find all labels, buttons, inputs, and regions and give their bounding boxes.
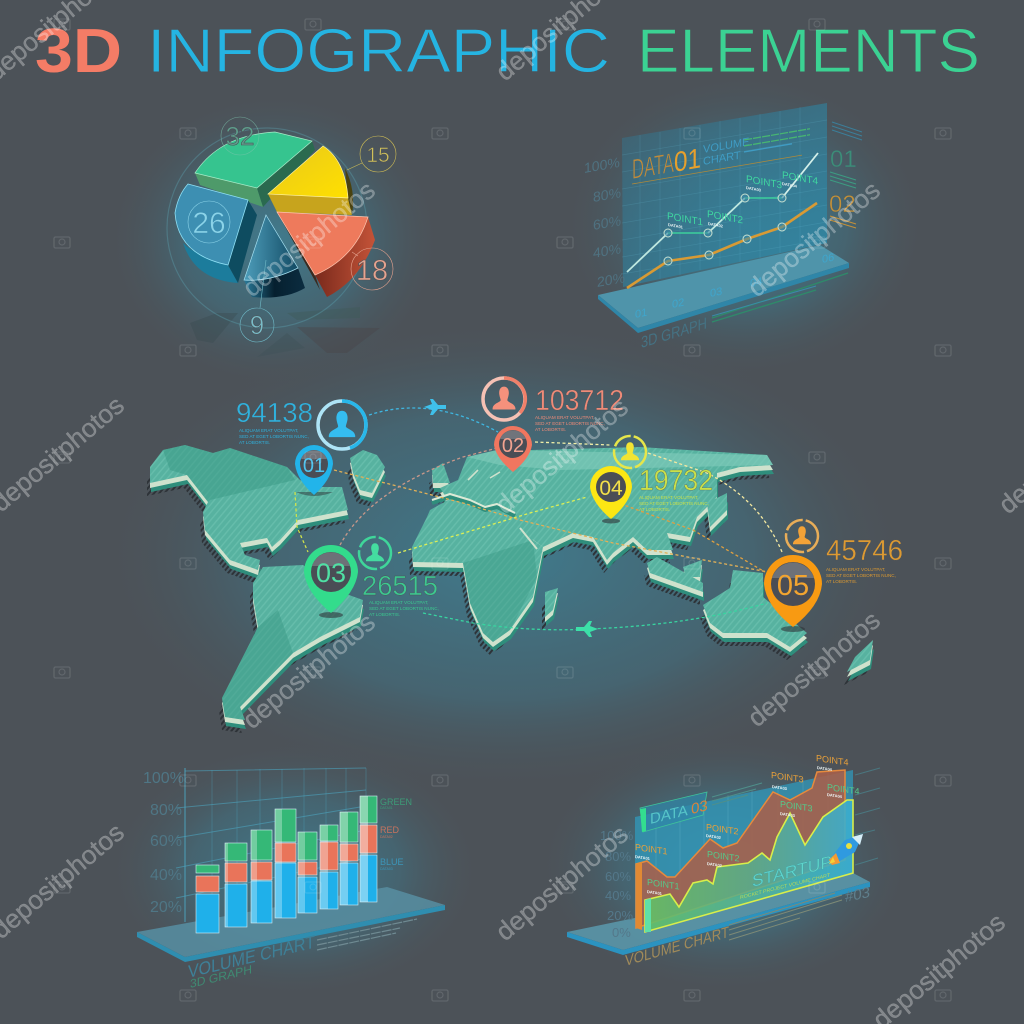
value block 19732: AT LOBORTIS. [639,507,670,512]
graph point labels: POINT4 [782,170,819,188]
graph axis labels: 60% [593,212,621,233]
area point labels: DATA02 [706,833,722,840]
graph point labels: DATA02 [708,221,724,229]
graph point labels [667,170,819,230]
value block 19732: 19732 [639,465,713,497]
green area left edge [645,898,651,932]
area point labels: POINT4 [816,753,848,768]
bar legend: DATA01 [380,806,393,810]
bar legend [380,797,412,871]
area y labels: 40% [605,888,631,903]
orange area left edge [636,862,642,930]
pie floor shadows [190,307,380,357]
pie value labels [188,117,396,342]
value block 45746 [826,535,903,584]
area back panel [635,770,853,928]
area point labels: POINT1 [647,877,679,892]
slice: green 32 [195,132,315,207]
graph point labels: POINT1 [667,211,704,229]
area point labels: DATA01 [635,854,651,861]
value block 103712 [535,385,624,432]
graph point labels: POINT2 [707,209,744,227]
value block 94138: SED AT EGET LOBORTIS NUNC, [239,434,309,439]
pie orbit ring [167,128,367,328]
graph back panel [622,103,827,287]
area caption: VOLUME CHART [625,924,729,970]
area point labels: DATA02 [707,861,723,868]
area grid [656,772,828,925]
title: INFOGRAPHIC [147,17,610,86]
data badge [640,783,762,832]
area y labels: 60% [605,869,631,884]
slice: yellow 15 [268,146,353,215]
value block 94138: ALIQUAM ERAT VOLUTPAT, [239,428,298,433]
value block 45746: ALIQUAM ERAT VOLUTPAT, [826,567,885,572]
bar chart y labels: 60% [150,833,182,850]
orange area series [636,770,845,928]
bar 1 [196,865,219,933]
bar chart grid [176,768,366,922]
icon: plane left [424,399,446,415]
value block 26515 [362,570,439,617]
glow halos [95,70,930,1000]
stock watermark text: depositphotos [490,392,634,520]
map continents [150,445,873,720]
title [35,17,980,86]
graph heading: DATA [632,146,674,185]
area point labels: POINT2 [706,822,738,837]
map facet shading [163,445,773,720]
bar 6 [320,825,338,909]
pin 02: 02 [502,435,524,457]
panel: 3D line graph: 06 [822,252,834,266]
graph heading: 01 [674,141,701,178]
area point labels: DATA04 [817,765,833,772]
value block 19732: SED AT EGET LOBORTIS NUNC, [639,501,709,506]
map flight routes [295,408,782,630]
pin 04: 04 [599,477,623,500]
bar 5 [298,832,317,913]
value block 26515: 26515 [362,570,438,601]
bar chart y labels: 100% [143,770,184,787]
graph point labels: DATA04 [782,181,798,189]
area point labels: POINT2 [707,849,739,864]
map extruded sides [151,454,874,729]
pin 02 [494,426,532,472]
area point labels: POINT4 [827,782,859,797]
graph side legend: 01 [830,146,857,173]
bar legend: RED [380,825,400,835]
pin 04 [590,466,632,524]
value block 94138: 94138 [236,397,313,428]
area y labels: 100% [600,828,634,843]
slice: blue 26 [175,184,257,283]
graph side legend: 02 [829,191,856,218]
startup label: ROCKET PROJECT VOLUME CHART [740,873,830,901]
panel: 3D pie chart [167,117,396,357]
person badge 01 [318,401,366,449]
area point labels: DATA03 [780,811,796,818]
graph point labels: DATA01 [668,222,684,230]
graph heading: VOLUME [703,136,749,156]
bar chart y labels: 80% [150,802,182,819]
graph axis labels: 40% [593,240,621,261]
graph point labels: POINT3 [746,174,783,192]
panel: 3D line graph: 03 [710,286,722,300]
person badge 02 [483,378,525,420]
pin 05 [764,555,822,632]
area y labels: 80% [605,849,631,864]
panel: 3D area chart [567,753,880,970]
area y labels: 0% [612,925,631,940]
value block 103712: SED AT EGET LOBORTIS NUNC, [535,421,605,426]
area point labels: DATA04 [827,792,843,799]
value block 103712: ALIQUAM ERAT VOLUTPAT, [535,415,594,420]
stock watermark text: depositphotos [742,175,886,303]
area point labels: POINT1 [635,842,667,857]
bar legend: DATA02 [380,835,393,839]
panel: 3D line graph: 01 [635,307,647,321]
icon: rocket [829,834,863,865]
bar legend: BLUE [380,857,404,867]
area y labels: 20% [607,908,633,923]
value block 26515: SED AT EGET LOBORTIS NUNC, [369,606,439,611]
stock watermark text: depositphotos [237,175,381,303]
bar 2 [225,843,247,927]
area point labels: POINT3 [771,770,803,785]
graph floor [598,245,849,328]
pie value labels: 32 [226,121,254,151]
map inner coast ridges [432,470,537,549]
area floor [567,873,870,950]
value block 45746: AT LOBORTIS. [826,579,857,584]
pin 03: 03 [316,558,346,588]
bar legend: GREEN [380,797,412,807]
value block 45746: SED AT EGET LOBORTIS NUNC, [826,573,896,578]
area caption [625,768,880,970]
panel: 3D line graph: 02 [672,297,684,311]
slice: red 18 [277,212,375,297]
bar legend: DATA03 [380,867,393,871]
graph lines [627,153,818,288]
stock watermark text: depositphotos [237,607,381,735]
data badge: DATA 03 [650,797,708,828]
value block 26515: ALIQUAM ERAT VOLUTPAT, [369,600,428,605]
pin 01 [295,445,333,496]
pie value labels: 26 [192,207,226,240]
bar chart floor [137,887,445,957]
green area series [645,800,853,932]
panel: 3D line graph: 04 [750,276,762,290]
pin 01: 01 [303,455,325,477]
pin 03 [304,545,358,618]
map hatched shadows [147,458,870,733]
bar 3 [251,830,272,923]
area point labels [635,753,859,896]
graph grid [622,107,827,283]
area point labels: POINT3 [780,799,812,814]
area caption: #03 [845,884,870,906]
bars [196,796,377,933]
pie value labels: 15 [366,144,390,167]
title: 3D [35,17,122,86]
person badge 05 [786,520,818,552]
area point labels: DATA01 [647,889,663,896]
icon: plane right [576,621,598,637]
pin 05: 05 [777,570,809,602]
bar chart y labels [143,770,184,916]
graph point labels: DATA03 [746,185,762,193]
stock watermark text: depositphotos [490,819,634,947]
area point labels: DATA03 [772,784,788,791]
pie value labels: 9 [250,310,264,340]
pie value labels: 18 [356,255,388,287]
value block 103712: 103712 [535,385,624,417]
graph heading: CHART [703,150,741,168]
panel: 3D world map [147,378,903,733]
slice: dark blue 9 [244,215,305,298]
graph side legend [829,122,862,228]
bar caption [188,919,417,991]
person badge 04 [614,436,646,468]
bar chart y labels: 20% [150,899,182,916]
graph axis labels: 100% [584,154,620,176]
startup label: STARTUP [752,851,832,891]
area y labels [600,828,634,940]
stock watermark text: depositphotos [742,605,886,733]
value block 19732 [639,465,713,512]
bar caption: 3D GRAPH [190,962,252,991]
graph heading [632,123,810,185]
value block 45746: 45746 [826,535,903,567]
bar 4 [275,809,296,918]
value block 103712: AT LOBORTIS. [535,427,566,432]
graph axis labels [584,154,625,290]
bar 7 [340,812,358,905]
bar caption: VOLUME CHART [188,931,315,982]
value block 19732: ALIQUAM ERAT VOLUTPAT, [639,495,698,500]
value block 26515: AT LOBORTIS. [369,612,400,617]
graph axis labels: 20% [597,269,625,290]
panel: 3D stacked bar chart [137,768,445,991]
person badge 03 [359,537,391,569]
graph caption: 3D GRAPH [641,315,707,352]
value block 94138: AT LOBORTIS. [239,440,270,445]
value block 94138 [236,397,313,445]
startup label [740,851,832,901]
bar chart y labels: 40% [150,867,182,884]
bar 8 [360,796,377,902]
panel: 3D line graph [584,103,862,352]
title: ELEMENTS [637,17,980,86]
graph caption [641,273,848,352]
graph axis labels: 80% [593,184,621,205]
